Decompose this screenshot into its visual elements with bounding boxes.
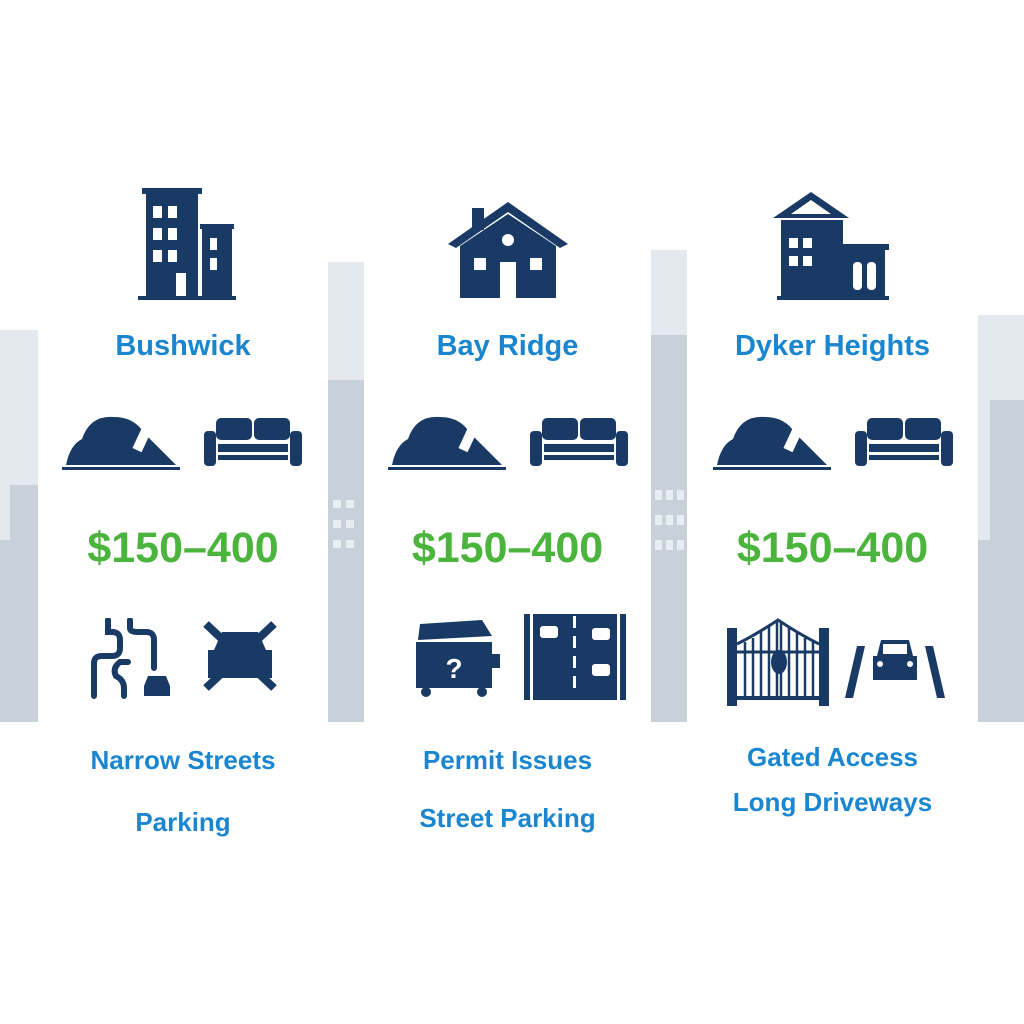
price: $150–400: [87, 524, 279, 572]
icon: driveway car: [845, 640, 945, 698]
icon: winding road with car: [91, 618, 170, 699]
heading: Bay Ridge: Bay Ridge: [437, 330, 578, 362]
icon: no parking car: [203, 621, 277, 691]
icon: gate: [727, 618, 829, 706]
label: Long Driveways: Long Driveways: [733, 787, 932, 817]
icon: debris pile: [388, 416, 506, 470]
icon: house: [448, 202, 568, 298]
icon: sofa: [855, 418, 953, 466]
heading: Dyker Heights: Dyker Heights: [735, 330, 930, 362]
price: $150–400: [412, 524, 603, 572]
icon: apartment building: [138, 188, 236, 300]
price: $150–400: [737, 524, 928, 572]
panel: Dyker Heights: [713, 192, 953, 817]
heading: Bushwick: Bushwick: [115, 330, 251, 362]
panel: Bay Ridge: [388, 202, 628, 833]
icon: debris pile: [713, 416, 831, 470]
label: Gated Access: Gated Access: [747, 742, 918, 772]
label: Parking: Parking: [135, 807, 231, 837]
icon: mansion: [773, 192, 889, 300]
icon: sofa: [204, 418, 302, 466]
label: Narrow Streets: Narrow Streets: [91, 745, 275, 775]
icon: debris pile: [62, 416, 180, 470]
panel: Bushwick: [62, 188, 302, 837]
icon: street parking: [524, 614, 626, 700]
icon: dumpster: [416, 620, 500, 697]
label: Street Parking: Street Parking: [419, 803, 596, 833]
label: Permit Issues: Permit Issues: [423, 745, 592, 775]
icon: sofa: [530, 418, 628, 466]
icon: dumpster: ?: [445, 653, 463, 684]
